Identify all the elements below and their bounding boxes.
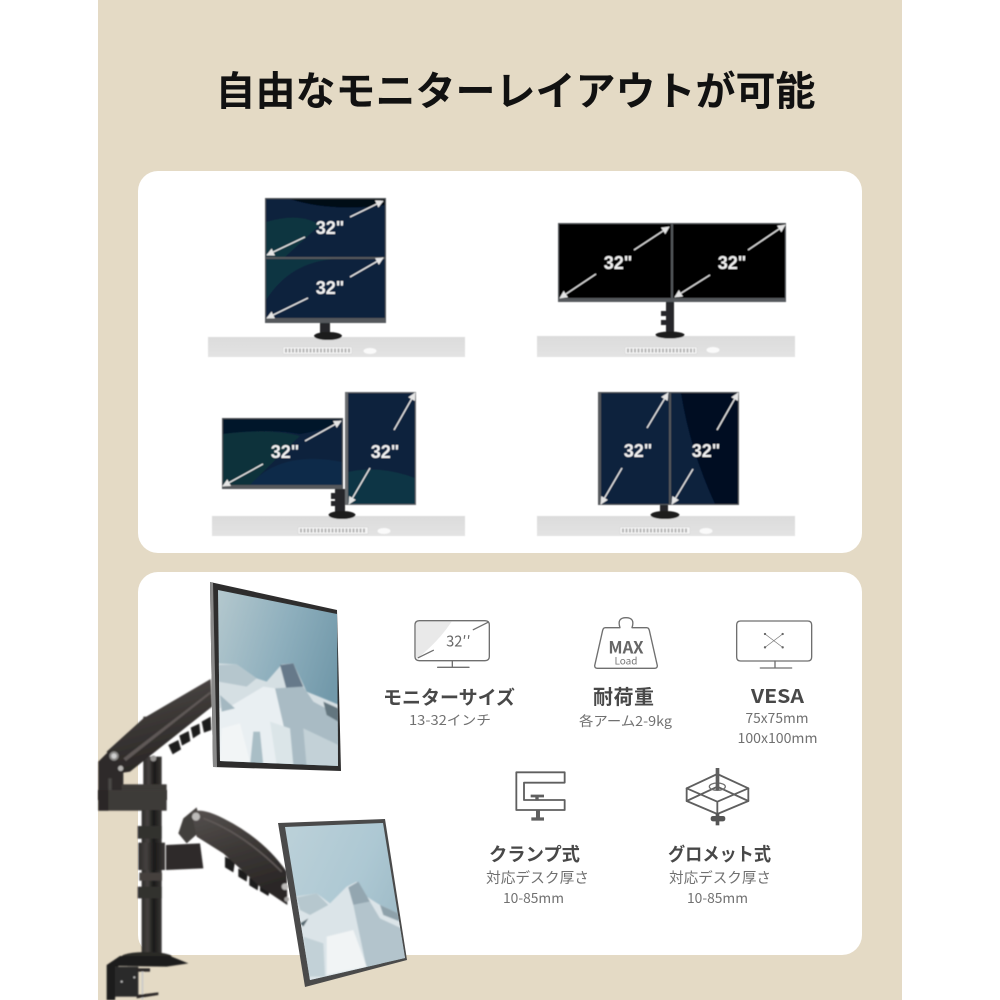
spec: VESA <box>737 621 818 747</box>
layout: side by side horizontal: 32" <box>718 253 746 273</box>
lower monitor <box>278 819 410 987</box>
icon: monitor size: 32′′ <box>446 630 471 651</box>
upper arm <box>98 679 212 800</box>
layout: horizontal plus portrait <box>212 392 465 536</box>
icon: grommet <box>687 768 748 825</box>
title: 自由なモニターレイアウトが可能 <box>216 59 816 117</box>
layout: horizontal plus portrait: 32" <box>371 442 399 462</box>
upper monitor <box>210 582 343 775</box>
thickness value: 10-85mm <box>503 887 564 907</box>
layout: side by side horizontal: 32" <box>604 253 632 273</box>
heading: VESA <box>750 682 805 709</box>
panel: monitor layouts <box>138 171 862 553</box>
value: 100x100mm: 100x100mm <box>738 727 818 747</box>
layout: horizontal plus portrait: 32" <box>271 442 299 462</box>
heading: モニターサイズ <box>383 683 515 710</box>
value: 75x75mm: 75x75mm <box>746 707 808 727</box>
heading: クランプ式 <box>489 841 580 867</box>
heading: グロメット式 <box>668 841 771 867</box>
icon: weight: Load <box>614 652 637 667</box>
spec: load capacity <box>579 618 672 730</box>
value: 13-32インチ <box>409 709 491 729</box>
product photo: dual monitor arm <box>98 582 410 1000</box>
thickness value: 10-85mm <box>687 887 748 907</box>
spec: clamp <box>486 772 589 907</box>
icon: VESA monitor <box>737 621 812 668</box>
spec: monitor size <box>383 621 515 729</box>
layout: stacked vertically: 32" <box>316 278 344 298</box>
heading: 耐荷重 <box>593 681 654 710</box>
icon: clamp <box>516 772 565 821</box>
layout: two portrait: 32" <box>692 441 720 461</box>
icon: weight: MAX <box>608 635 644 659</box>
spec: grommet <box>668 768 771 907</box>
layout: stacked vertically: 32" <box>316 218 344 238</box>
value: 各アーム2-9kg <box>579 710 672 730</box>
panel: specifications <box>138 572 862 955</box>
thickness label: 対応デスク厚さ <box>669 867 771 888</box>
icon: weight <box>595 618 657 668</box>
thickness label: 対応デスク厚さ <box>486 867 589 888</box>
layout: stacked vertically <box>208 198 465 357</box>
layout: side by side horizontal <box>537 223 795 357</box>
layout: two portrait <box>537 392 795 536</box>
layout: two portrait: 32" <box>624 441 652 461</box>
pole and lower arm <box>98 790 289 1000</box>
